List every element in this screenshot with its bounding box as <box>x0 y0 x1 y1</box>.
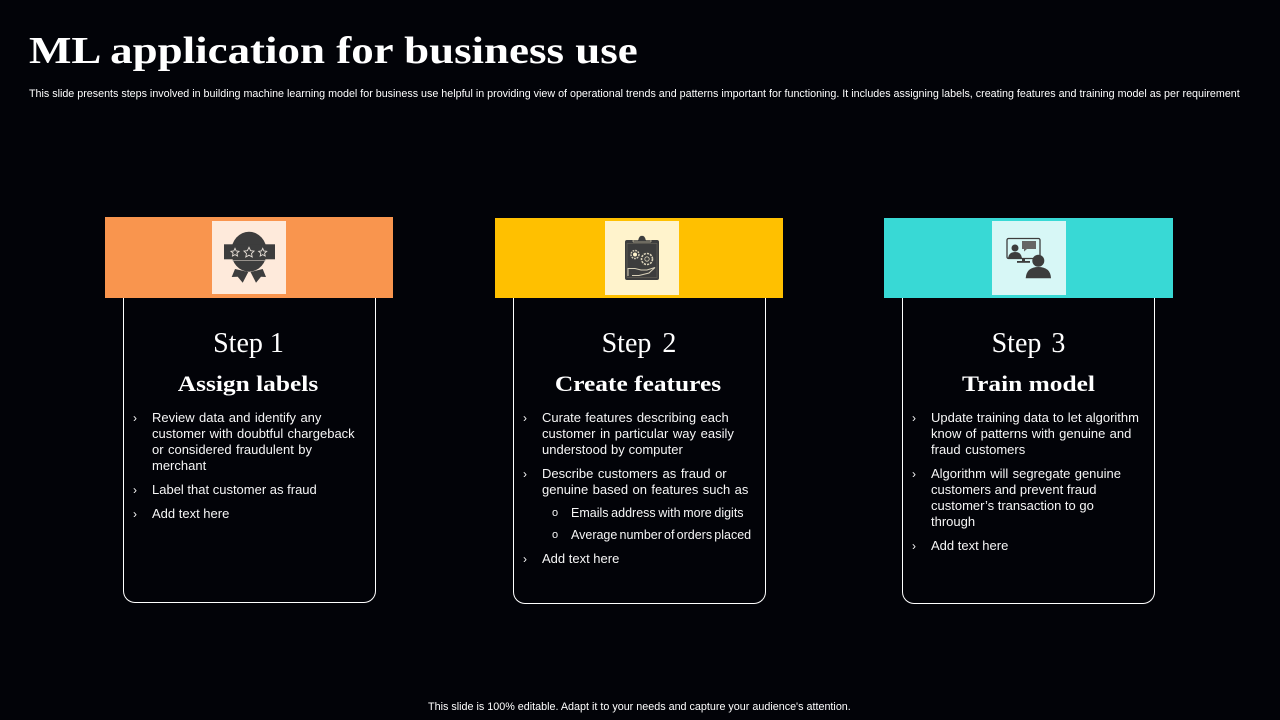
step 2 bullets: Emails address with more digits <box>571 506 744 520</box>
step 2 bullets: › <box>523 552 527 566</box>
step 2 bullets: o <box>552 529 558 541</box>
step 3 bullets: Update training data to let algorithm <box>931 410 1139 425</box>
card outline 2 <box>513 297 766 604</box>
header band 3 <box>884 218 1173 298</box>
panel: step 2 <box>495 218 783 604</box>
title: ML application for business use <box>29 30 638 72</box>
step 3 bullets: › <box>912 539 916 553</box>
step 1 bullets: Review data and identify any <box>152 410 321 425</box>
step 1 bullets: Label that customer as fraud <box>152 482 317 497</box>
card outline 1 <box>123 297 376 603</box>
step 2 bullets: understood by computer <box>542 442 683 457</box>
step 2 bullets: customer in particular way easily <box>542 426 734 441</box>
step 2 bullets: Add text here <box>542 551 619 566</box>
step 2 bullets <box>523 410 751 566</box>
step 1 bullets: › <box>133 507 137 521</box>
step 3 bullets: customers and prevent fraud <box>931 482 1096 497</box>
icon: clipboard with gears <box>605 221 679 295</box>
step 3 bullets: › <box>912 467 916 481</box>
step 1 bullets: Add text here <box>152 506 229 521</box>
step 3 label: Step 3 <box>992 328 1065 359</box>
icon: video call presenter <box>992 221 1066 295</box>
card outline 3 <box>902 297 1155 604</box>
step 2 bullets: Describe customers as fraud or <box>542 466 727 481</box>
step 2 bullets: Curate features describing each <box>542 410 729 425</box>
footer note: This slide is 100% editable. Adapt it to your needs and capture your audience's attention. <box>428 701 851 713</box>
header band 1 <box>105 217 393 298</box>
subtitle description: This slide presents steps involved in building machine learning model for business use helpful in providing view of operational trends and patterns important for functioning. It includes assigning labels, creating features and training model as per requirement <box>29 88 1240 100</box>
icon: award badge <box>212 221 286 294</box>
step 2 bullets: › <box>523 467 527 481</box>
panel: step 1 <box>105 217 393 603</box>
step 1 label: Step 1 <box>213 328 284 359</box>
step 1 bullets: customer with doubtful chargeback <box>152 426 355 441</box>
step 1 bullets: or considered fraudulent by <box>152 442 312 457</box>
step 1 bullets: › <box>133 483 137 497</box>
step 3 bullets <box>912 410 1139 553</box>
step 3 bullets: customer’s transaction to go <box>931 498 1094 513</box>
step 3 bullets: through <box>931 514 975 529</box>
step 2 bullets: Average number of orders placed <box>571 528 751 542</box>
step 3 heading: Train model <box>962 371 1095 396</box>
step 3 bullets: › <box>912 411 916 425</box>
step 1 bullets: merchant <box>152 458 206 473</box>
step 2 heading: Create features <box>555 371 721 396</box>
step 1 heading: Assign labels <box>178 371 318 396</box>
step 2 bullets: o <box>552 507 558 519</box>
step 2 bullets: › <box>523 411 527 425</box>
step 2 label: Step 2 <box>602 328 676 359</box>
panel: step 3 <box>884 218 1173 604</box>
step 1 bullets: › <box>133 411 137 425</box>
step 1 bullets <box>133 410 355 521</box>
step 3 bullets: know of patterns with genuine and <box>931 426 1131 441</box>
step 2 bullets: genuine based on features such as <box>542 482 748 497</box>
header band 2 <box>495 218 783 298</box>
step 3 bullets: fraud customers <box>931 442 1025 457</box>
step 3 bullets: Algorithm will segregate genuine <box>931 466 1121 481</box>
step 3 bullets: Add text here <box>931 538 1008 553</box>
